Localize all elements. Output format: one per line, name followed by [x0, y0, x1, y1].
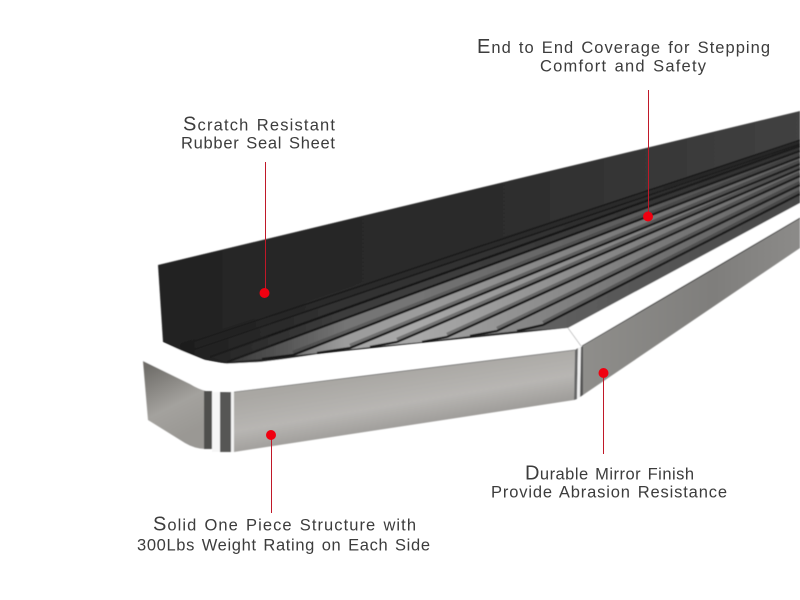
leader line: [602, 373, 604, 454]
leader line: [264, 162, 266, 293]
text: scratch resistant: Scratch Resistant: [183, 114, 335, 136]
text: comfort and safety: Comfort and Safety: [540, 58, 707, 76]
front top edge: [234, 350, 575, 392]
red dot: [260, 288, 270, 298]
front face: [234, 350, 575, 452]
text: solid one piece: Solid One Piece Structure with: [153, 514, 416, 536]
leader line: [648, 90, 650, 216]
text: durable mirror finish: Durable Mirror Finish: [525, 462, 694, 484]
callout: scratch resistant: [181, 114, 335, 298]
leader line: [270, 435, 272, 513]
right top edge: [582, 218, 800, 346]
chrome strip: [204, 391, 235, 452]
text: rubber seal sheet: Rubber Seal Sheet: [181, 134, 335, 152]
rib shadows: [293, 154, 800, 352]
callout: end to end coverage: [477, 36, 770, 222]
callout: durable mirror finish: [491, 368, 727, 502]
right face: [583, 218, 800, 395]
red dot: [266, 430, 276, 440]
left end face: [143, 361, 206, 449]
callout: solid one piece: [137, 430, 430, 554]
rib lines: [180, 140, 800, 362]
text: end to end: End to End Coverage for Stepping: [477, 36, 770, 58]
floor shading: [180, 140, 800, 366]
text: weight rating: 300Lbs Weight Rating on Each Side: [137, 536, 430, 554]
rubber floor: [180, 140, 800, 366]
text: abrasion resistance: Provide Abrasion Resistance: [491, 484, 727, 502]
red dot: [643, 212, 653, 222]
rim corner seam: [568, 328, 581, 346]
red dot: [598, 368, 608, 378]
white rim: [143, 203, 800, 392]
rubber wall: [158, 111, 800, 350]
corner chrome: [574, 346, 583, 400]
product: running board: [143, 111, 800, 452]
